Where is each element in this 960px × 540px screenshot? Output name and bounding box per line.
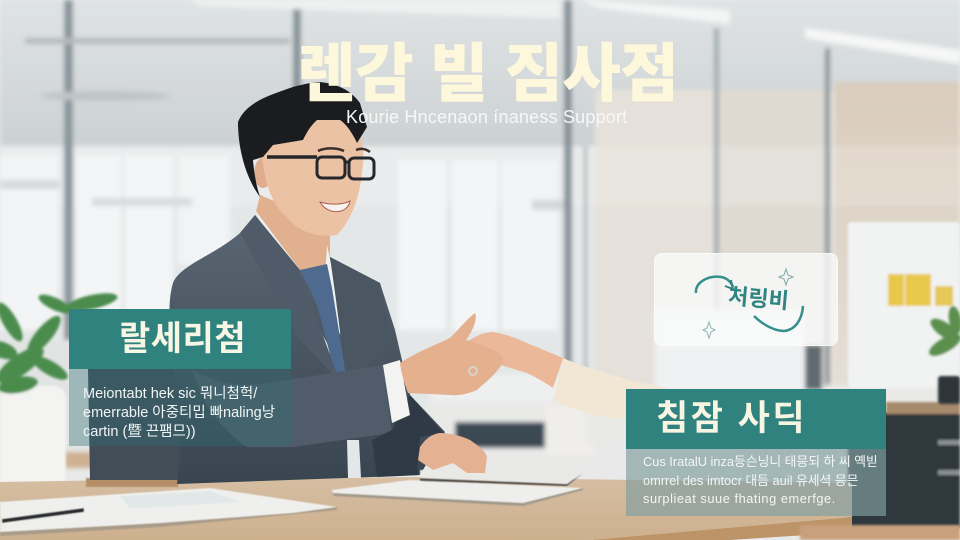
desk (0, 477, 960, 540)
face (262, 114, 363, 236)
glasses (267, 157, 374, 179)
plants (0, 290, 960, 490)
ear (254, 158, 272, 188)
subtitle: Kourie Hncenaon ínaness Support (346, 107, 627, 127)
shirt (255, 210, 345, 378)
icon: swoosh arrows and sparkles (694, 268, 804, 340)
right panel text: omrrel des imtocr 대듬 auil 유세셕 믕믄 (643, 472, 858, 488)
right panel heading: 침잠 사딕 (656, 399, 807, 438)
cuff (383, 360, 410, 423)
right panel text: surplieat suue fhating emerfge. (643, 491, 836, 506)
left panel text: cartin (暨 끈팸므)) (83, 424, 196, 440)
right panel text: Cus IratalU inza등슨닝니 태믕되 하 씨 옉빋 (643, 454, 878, 469)
partner sleeve (553, 358, 668, 420)
documents (0, 470, 583, 536)
left panel body (69, 369, 291, 446)
logo text: 처링비 (727, 283, 790, 314)
brows (318, 148, 370, 152)
tie (300, 264, 346, 378)
lapels (240, 215, 340, 382)
hand clasp (400, 313, 503, 395)
left panel heading bar (69, 309, 291, 369)
ring (469, 367, 477, 375)
hand on papers (418, 433, 487, 473)
chair back (88, 369, 190, 480)
left panel heading: 랄세리첨 (119, 320, 246, 358)
right panel body (626, 449, 886, 516)
neck (256, 195, 330, 270)
left panel text: Meiontabt hek sic 뭐니첨헉/ (83, 386, 257, 402)
torso and jacket (170, 215, 445, 484)
smile (320, 201, 350, 212)
partner arm (465, 332, 563, 388)
sleeve (193, 365, 392, 447)
left panel text: emerrable 아중티밉 빠naling낭 (83, 405, 275, 421)
left panel text (83, 386, 275, 440)
whiteboard and cabinet (848, 222, 960, 528)
man (170, 82, 668, 484)
panel: left callout (69, 309, 291, 446)
panel: glass logo card (654, 253, 838, 346)
title: 렌감 빌 짐사점 (297, 38, 678, 110)
right panel heading bar (626, 389, 886, 449)
far sleeve (372, 395, 443, 477)
panel: right callout (626, 389, 886, 516)
right panel text (643, 454, 878, 506)
hair (238, 82, 367, 197)
